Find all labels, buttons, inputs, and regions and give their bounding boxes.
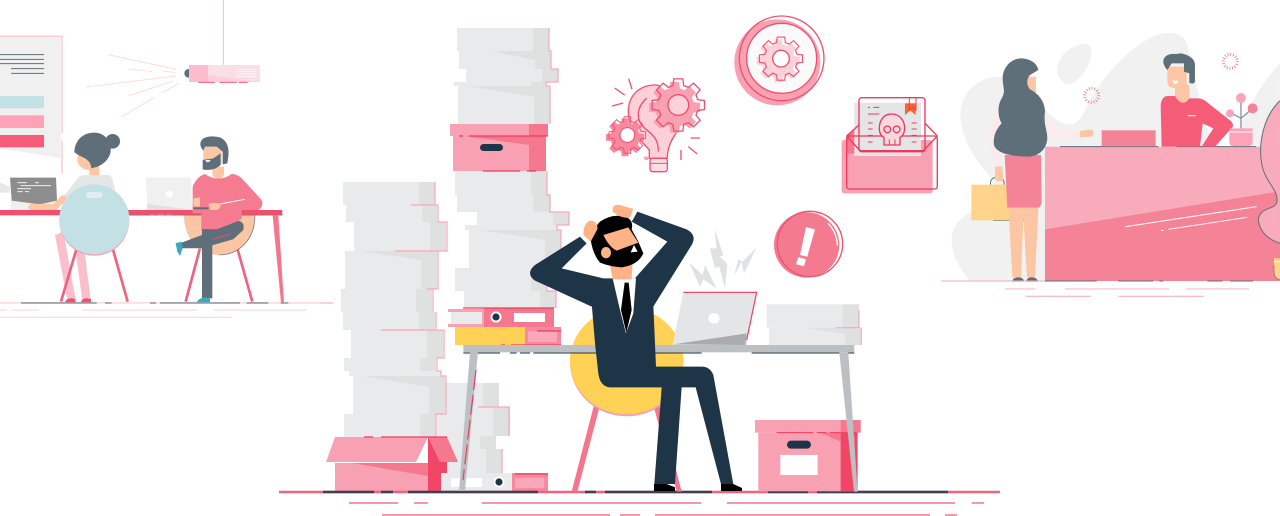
left stack shaded sides	[360, 182, 446, 437]
large leaf at right edge	[1258, 101, 1280, 243]
panel: reception desk scene	[941, 33, 1280, 296]
woman torso	[63, 133, 120, 217]
back small stack	[437, 383, 510, 474]
open pink box	[326, 437, 458, 491]
icon: gear coin	[734, 16, 824, 105]
chair	[570, 308, 683, 492]
potted plant	[1226, 93, 1258, 146]
bearded man	[176, 136, 262, 302]
woman arm	[32, 198, 63, 207]
reception counter	[1037, 147, 1280, 281]
icon: envelope with skull letter	[842, 98, 937, 193]
icon: light bulb with gears	[606, 79, 704, 172]
shopping bag	[971, 177, 1024, 221]
panel: stressed man at desk	[463, 205, 861, 492]
left stack pink edge	[381, 182, 447, 437]
bottom binder on floor	[441, 473, 548, 491]
woman customer	[988, 58, 1094, 282]
icon: exclamation badge	[774, 211, 843, 278]
desk top	[463, 345, 854, 353]
right stack shaded sides	[468, 28, 569, 308]
receptionist	[1161, 53, 1233, 147]
projector	[86, 0, 260, 117]
woman legs	[55, 232, 91, 302]
binders on desk	[448, 308, 561, 345]
poster on wall	[0, 36, 62, 193]
pink storage box in right stack	[450, 124, 548, 171]
floor line and dashes	[941, 281, 1249, 296]
panel: floating icons	[606, 16, 937, 278]
red accent on left desk leg	[463, 370, 476, 480]
hands	[583, 205, 633, 242]
left desk leg	[459, 352, 478, 491]
sparkle marks	[1085, 54, 1237, 102]
lightning bolts	[689, 228, 757, 288]
background blobs	[952, 33, 1280, 281]
right stack pink edge	[546, 28, 569, 308]
shirt and tie	[580, 210, 637, 333]
cup at right edge	[1274, 258, 1280, 280]
right stack	[454, 28, 569, 308]
central floor line and dashes	[279, 492, 1000, 515]
paper stack on desk	[767, 304, 861, 345]
right desk leg	[839, 352, 858, 492]
shoes	[654, 484, 742, 491]
ball chair	[59, 184, 129, 256]
panel: central stacks of boxes	[279, 28, 1000, 515]
dark laptop	[10, 178, 57, 210]
bearded man chair	[184, 215, 255, 302]
left stack	[341, 182, 446, 437]
ball chair legs	[61, 248, 128, 302]
edge mark left of centre stack	[320, 302, 333, 304]
panel: left office scene	[0, 0, 333, 317]
floor and dashes	[0, 303, 333, 317]
laptop	[673, 292, 757, 345]
head	[591, 216, 643, 279]
arms	[530, 212, 694, 307]
man legs and torso	[592, 278, 733, 484]
light laptop	[146, 178, 193, 210]
storage box under desk	[755, 420, 861, 492]
table	[0, 210, 284, 302]
pink sign on counter	[1102, 130, 1156, 146]
